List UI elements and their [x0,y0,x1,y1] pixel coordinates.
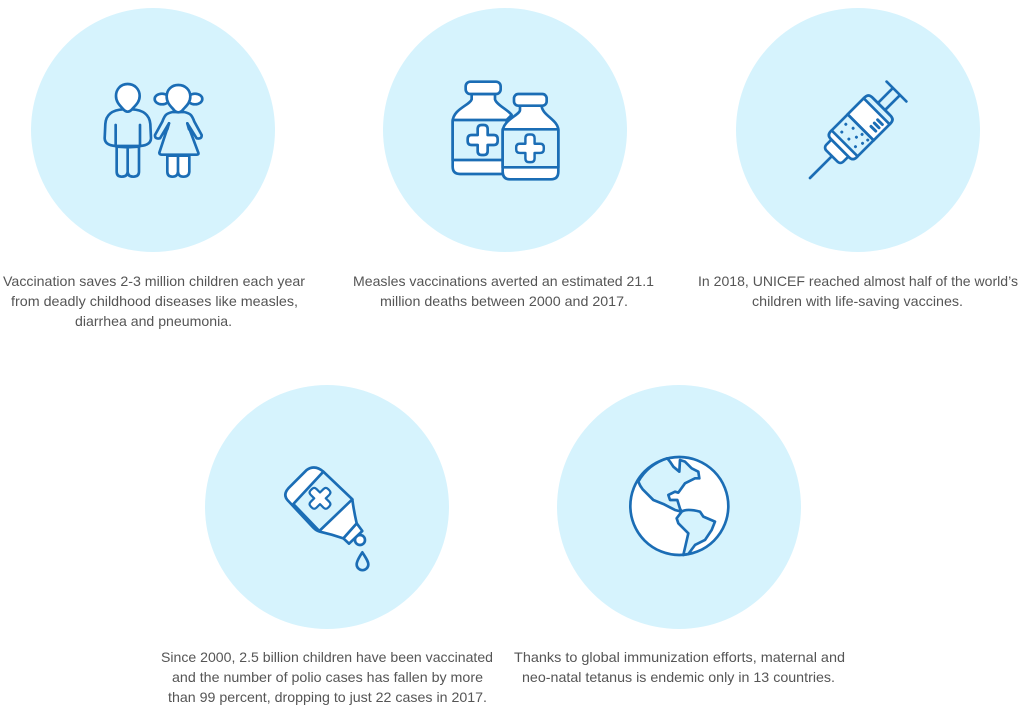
circle background [205,385,449,629]
icon: dropper bottle [285,468,368,570]
text: measles deaths averted: Measles vaccinations averted an estimated 21.1 [353,273,654,289]
text: children saved: Vaccination saves 2-3 million children each year [3,273,305,289]
icon: medicine bottles [453,82,558,179]
panel: children saved [3,8,305,329]
circle background [557,385,801,629]
icon: syringe [797,79,909,191]
panel: measles deaths averted [353,8,654,309]
text: UNICEF reach: children with life-saving vaccines. [752,293,963,309]
text: polio cases: Since 2000, 2.5 billion children have been vaccinated [161,649,493,665]
icon: globe [630,457,728,555]
panel: tetanus [514,385,845,685]
text: polio cases: and the number of polio cases has fallen by more [172,669,483,685]
icon: boy and girl [105,84,202,177]
text: tetanus: Thanks to global immunization efforts, maternal and [514,649,845,665]
text: measles deaths averted [353,273,654,309]
text: measles deaths averted: million deaths between 2000 and 2017. [380,293,628,309]
text: UNICEF reach: In 2018, UNICEF reached almost half of the world’s [698,273,1018,289]
text: polio cases: than 99 percent, dropping to just 22 cases in 2017. [168,689,487,705]
circle background [31,8,275,252]
text: children saved [3,273,305,329]
text: children saved: from deadly childhood diseases like measles, [11,293,298,309]
panel: polio cases [161,385,493,705]
text: UNICEF reach [698,273,1018,309]
text: tetanus [514,649,845,685]
panel: UNICEF reach [698,8,1018,309]
circle background [736,8,980,252]
text: children saved: diarrhea and pneumonia. [75,313,232,329]
text: polio cases [161,649,493,705]
circle background [383,8,627,252]
text: tetanus: neo-natal tetanus is endemic only in 13 countries. [522,669,835,685]
